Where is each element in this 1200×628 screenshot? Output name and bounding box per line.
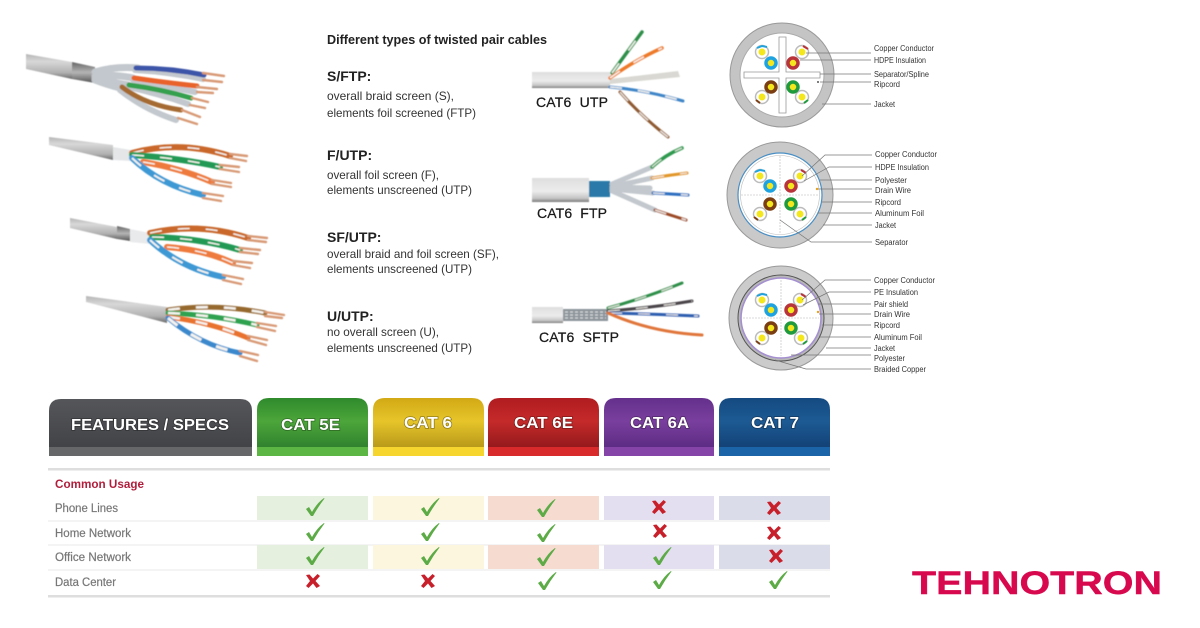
- labels: SFTP: Polyester: [874, 354, 905, 363]
- text block: U/UTP: no overall screen (U),: [327, 325, 439, 339]
- text block: F/UTP: [327, 147, 472, 197]
- cable: S/FTP: [26, 54, 224, 124]
- labels: SFTP: Braided Copper: [874, 365, 926, 374]
- labels: SFTP: Drain Wire: [874, 310, 911, 319]
- text block: F/UTP: F/UTP:: [327, 147, 372, 163]
- text block: S/FTP: elements foil screened (FTP): [327, 106, 476, 120]
- header: Features / Specs: FEATURES / SPECS: [71, 417, 229, 434]
- header: CAT 5E: CAT 5E: [281, 417, 340, 434]
- cable: CAT6 UTP: CAT6 UTP: [536, 94, 608, 110]
- labels: SFTP: PE Insulation: [874, 288, 918, 297]
- row labels: Data Center: [55, 577, 116, 589]
- labels: FTP: Drain Wire: [875, 186, 912, 195]
- labels: FTP: Aluminum Foil: [875, 209, 924, 218]
- header: CAT 6: [373, 398, 484, 456]
- labels: UTP: Copper Conductor: [874, 44, 934, 53]
- text block: SF/UTP: elements unscreened (UTP): [327, 262, 472, 276]
- heading: different types: Different types of twisted pair cables: [327, 32, 547, 47]
- text block: S/FTP: [327, 68, 476, 120]
- text block: S/FTP: S/FTP:: [327, 68, 371, 84]
- cable: CAT6 UTP: [532, 32, 683, 137]
- cable: U/UTP: [86, 296, 284, 361]
- labels: UTP: Ripcord: [874, 80, 900, 89]
- cable: CAT6 FTP: [532, 148, 688, 221]
- labels: SFTP: Aluminum Foil: [874, 333, 922, 342]
- labels: SFTP: Copper Conductor: [874, 276, 935, 285]
- header: CAT 6E: CAT 6E: [514, 415, 573, 432]
- header: CAT 5E: [257, 398, 368, 456]
- header: CAT 7: [719, 398, 830, 456]
- header: CAT 7: CAT 7: [751, 415, 799, 432]
- labels: SFTP: [874, 276, 935, 374]
- labels: FTP: Copper Conductor: [875, 150, 937, 159]
- diagram: SFTP cross-section: [729, 266, 935, 374]
- labels: FTP: Jacket: [875, 221, 897, 230]
- text block: SF/UTP: overall braid and foil screen (SF),: [327, 247, 499, 261]
- diagram: UTP cross-section: [730, 23, 934, 127]
- text block: F/UTP: elements unscreened (UTP): [327, 183, 472, 197]
- row labels: Office Network: [55, 552, 131, 564]
- row labels: Phone Lines: [55, 503, 118, 515]
- cable: CAT6 SFTP: [532, 283, 702, 345]
- labels: UTP: [874, 44, 934, 109]
- cable: SF/UTP: [70, 218, 267, 284]
- section label: Common Usage: Common Usage: [55, 477, 144, 491]
- row bands: [257, 496, 830, 569]
- labels: SFTP: Pair shield: [874, 300, 908, 309]
- text block: U/UTP: elements unscreened (UTP): [327, 341, 472, 355]
- labels: UTP: HDPE Insulation: [874, 56, 926, 65]
- diagram: FTP cross-section: [727, 142, 937, 248]
- row labels: Home Network: [55, 528, 131, 540]
- panel: comparison table: [48, 398, 830, 598]
- header: CAT 6A: CAT 6A: [630, 415, 689, 432]
- logo: Tehnotron: TEHNOTRON: [912, 565, 1162, 601]
- header: CAT 6A: [604, 398, 714, 456]
- text block: U/UTP: [327, 308, 472, 355]
- text block: S/FTP: overall braid screen (S),: [327, 89, 454, 103]
- icons: ticks and crosses: [306, 498, 788, 590]
- row labels: [55, 503, 131, 589]
- labels: UTP: Separator/Spline: [874, 70, 930, 79]
- labels: UTP: Jacket: [874, 100, 896, 109]
- labels: FTP: HDPE Insulation: [875, 163, 929, 172]
- text block: SF/UTP: [327, 229, 499, 276]
- panel: CAT6 cables (middle column): [532, 32, 702, 345]
- labels: FTP: Polyester: [875, 176, 907, 185]
- labels: SFTP: Jacket: [874, 344, 896, 353]
- panel: cable photos (left column): [26, 54, 284, 361]
- labels: FTP: Separator: [875, 238, 908, 247]
- header: Features / Specs: [49, 399, 252, 456]
- text block: F/UTP: overall foil screen (F),: [327, 168, 439, 182]
- labels: FTP: [875, 150, 937, 247]
- cable: CAT6 SFTP: CAT6 SFTP: [539, 329, 619, 345]
- labels: SFTP: Ripcord: [874, 321, 900, 330]
- labels: FTP: Ripcord: [875, 198, 901, 207]
- cable: CAT6 FTP: CAT6 FTP: [537, 205, 607, 221]
- text block: U/UTP: U/UTP:: [327, 308, 374, 324]
- text block: SF/UTP: SF/UTP:: [327, 229, 381, 245]
- cable: F/UTP: [49, 137, 247, 201]
- header: CAT 6: CAT 6: [404, 415, 452, 432]
- header: CAT 6E: [488, 398, 599, 456]
